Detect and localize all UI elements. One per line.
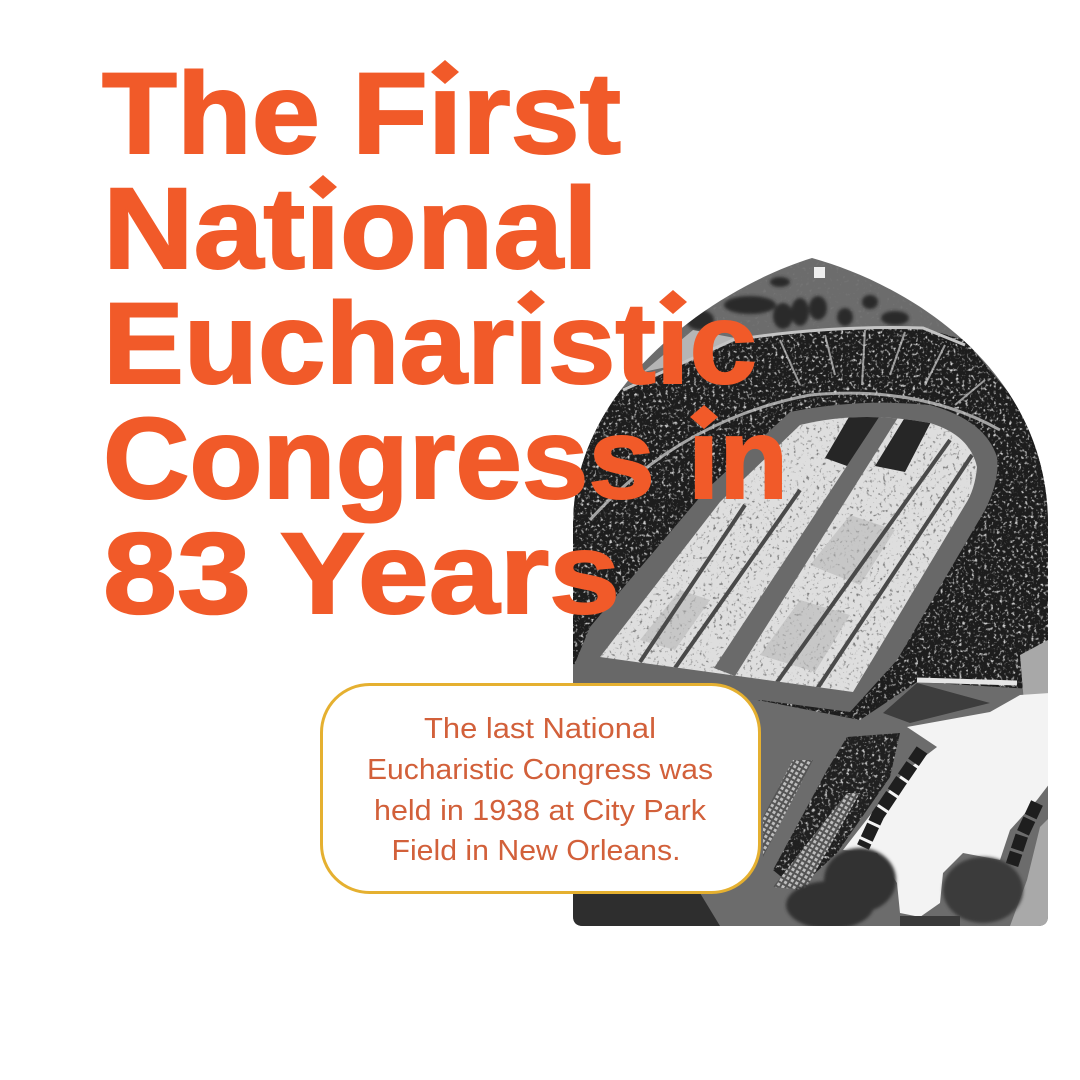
- trees on top grounds: [686, 277, 909, 330]
- grey seating sections: [640, 515, 895, 672]
- light wedge left of stands: [643, 330, 735, 372]
- trees bottom: [786, 848, 896, 929]
- diamond dots on the letter i: [309, 60, 718, 429]
- running track: [573, 403, 998, 712]
- bottom right edge: [1010, 817, 1050, 926]
- title words: The: [102, 50, 320, 178]
- white plaza: [843, 693, 1050, 917]
- photo: aerial view of City Park Field in an arch frame: [573, 258, 1050, 929]
- title words: Years: [280, 510, 620, 638]
- stands speckle: [573, 320, 1048, 720]
- title words: in: [688, 395, 788, 523]
- title words: [102, 50, 788, 638]
- dark seating blocks: [825, 417, 930, 472]
- callout box: [322, 684, 760, 892]
- title: [102, 50, 788, 638]
- callout text: The last National: [424, 713, 656, 745]
- title words: First: [352, 50, 621, 178]
- water tower: [814, 267, 825, 278]
- parked cars right: [1012, 803, 1037, 865]
- bottom strip: [900, 916, 960, 926]
- field texture: [600, 418, 976, 690]
- stand white rim: [917, 680, 1017, 683]
- title words: Congress: [103, 395, 655, 523]
- callout text: Field in New Orleans.: [392, 835, 680, 867]
- title words: 83: [103, 510, 251, 638]
- seating block 2: [773, 793, 860, 890]
- central aisle: [714, 408, 904, 676]
- field seating: [600, 417, 977, 692]
- photo base: grounds: [573, 258, 1048, 926]
- grounds texture: [660, 264, 932, 348]
- parked cars left: [863, 750, 922, 847]
- lower crowd speckle: [773, 734, 899, 874]
- title words: National: [103, 165, 598, 293]
- lower crowd: [773, 733, 900, 890]
- grandstand building: [1020, 640, 1048, 695]
- trees bottom right: [943, 857, 1023, 923]
- stand rim and aisles: [590, 328, 1000, 520]
- lower right stand: [883, 683, 990, 723]
- callout text: [367, 713, 713, 867]
- stands crowd: [573, 320, 1048, 720]
- callout text: Eucharistic Congress was: [367, 754, 713, 786]
- thin aisles: [640, 440, 972, 692]
- bottom left ground: [573, 893, 720, 926]
- seating block 1: [763, 760, 813, 857]
- title words: Eucharistic: [103, 280, 757, 408]
- callout text: held in 1938 at City Park: [374, 795, 707, 827]
- field: [600, 417, 977, 692]
- callout: [322, 684, 760, 892]
